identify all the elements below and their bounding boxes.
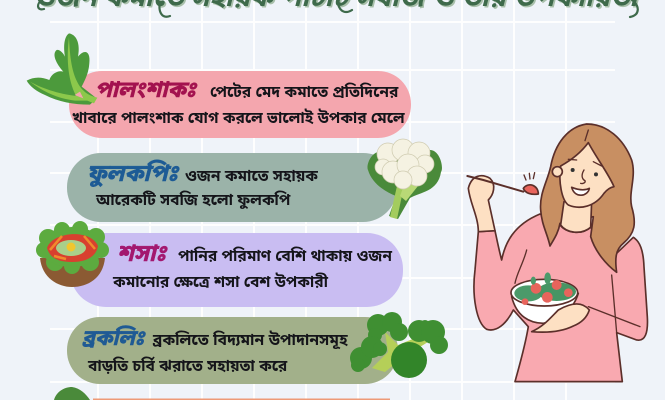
text: spinach description: খাবারে পালংশাক যোগ করলে ভালোই উপকার মেলে	[72, 109, 405, 127]
text: cucumber description	[112, 247, 392, 291]
text: cucumber description: পানির পরিমাণ বেশি থাকায় ওজন	[178, 247, 392, 265]
heading: broccoli: ব্রকলিঃ	[82, 325, 147, 350]
hand and fork	[467, 173, 538, 232]
heading: spinach: পালংশাকঃ	[95, 77, 198, 102]
icon: bottom vegetable	[54, 387, 90, 400]
text: spinach description: পেটের মেদ কমাতে প্রতিদিনের	[210, 83, 399, 101]
icon: salad bowl	[36, 221, 109, 287]
sweater	[474, 214, 647, 382]
text: cucumber description: কমানোর ক্ষেত্রে শসা বেশ উপকারী	[112, 273, 329, 291]
illustration: woman eating salad	[467, 124, 647, 382]
salad bowl	[511, 272, 578, 323]
hair	[541, 124, 634, 272]
icon: cauliflower	[367, 139, 442, 219]
icon: spinach leaf	[27, 33, 97, 105]
text: broccoli description: বাড়তি চর্বি ঝরাতে সহায়তা করে	[87, 356, 288, 375]
heading: cucumber: শসাঃ	[117, 240, 168, 266]
text: broccoli description: ব্রকলিতে বিদ্যমান উপাদানসমূহ	[152, 331, 348, 350]
face	[560, 143, 614, 207]
text: cauliflower description: ওজন কমাতে সহায়ক	[185, 168, 318, 185]
panel: spinach	[69, 71, 411, 138]
panel: bottom item	[93, 398, 390, 400]
text: spinach description	[72, 83, 405, 127]
icon: broccoli	[350, 312, 448, 378]
lower hand	[532, 304, 589, 332]
text: broccoli description	[87, 331, 348, 375]
panel: broccoli	[67, 317, 398, 384]
panel: cucumber	[70, 233, 403, 307]
heading: cauliflower: ফুলকপিঃ	[87, 159, 180, 187]
text: cauliflower description	[95, 168, 318, 210]
neck	[561, 202, 592, 232]
panel: cauliflower	[67, 153, 397, 222]
text: cauliflower description: আরেকটি সবজি হলো ফুলকপি	[95, 190, 291, 210]
